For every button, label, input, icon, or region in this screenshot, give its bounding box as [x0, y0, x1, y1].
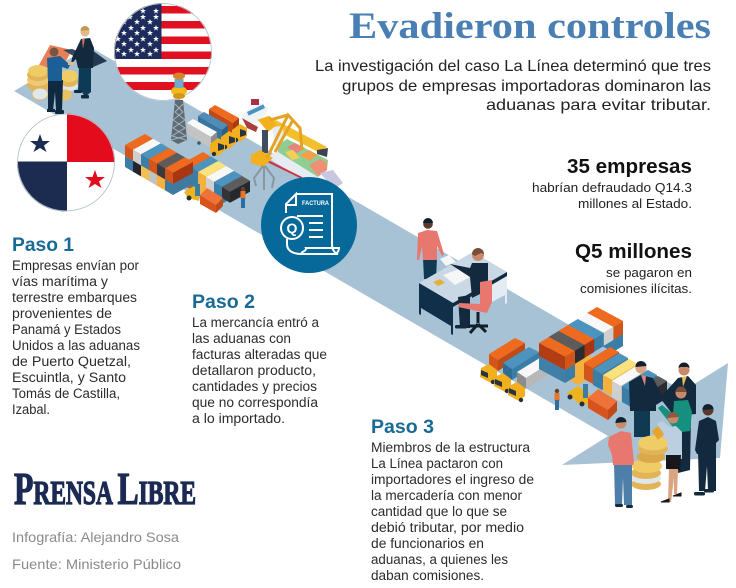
step 2: las aduanas con: [192, 331, 291, 346]
step 2: que no correspondía: [192, 395, 319, 410]
step 1: vías marítima y: [12, 274, 108, 289]
invoice badge: [261, 177, 357, 273]
step 2: La mercancía entró a: [192, 315, 320, 330]
step 3: daban comisiones.: [371, 568, 484, 583]
step 1: Unidos a las aduanas: [12, 338, 140, 353]
step 1: Izabal.: [12, 402, 50, 417]
flag: Panama: [17, 113, 116, 212]
step 1: Paso 1: [12, 235, 74, 256]
intro text: [315, 58, 711, 114]
step 2: a lo importado.: [192, 411, 285, 426]
intro text: grupos de empresas importadoras dominaron las: [342, 78, 711, 95]
step 1: Tomás de Castilla,: [12, 386, 120, 401]
step 3: [371, 417, 534, 583]
stat: Q5 millones: Q5 millones: [575, 241, 692, 263]
step 3: La Línea pactaron con: [371, 456, 503, 471]
illustration: container stacks left: [125, 134, 193, 195]
illustration: forklift and small container: [184, 184, 223, 213]
step 3: aduanas, a quienes les: [371, 552, 508, 567]
step 1: [12, 235, 140, 417]
intro text: aduanas para evitar tributar.: [486, 97, 711, 114]
illustration: business handshake with coins: [27, 26, 107, 114]
invoice badge: Q: [287, 220, 298, 236]
step 2: cantidades y precios: [192, 379, 317, 394]
stat: Q5 millones: se pagaron en: [606, 265, 692, 280]
step 1: provenientes de: [12, 306, 112, 321]
illustration: trucks lower group: [480, 338, 553, 402]
stat: 35 empresas: millones al Estado.: [578, 196, 692, 211]
step 3: de funcionarios en: [371, 536, 484, 551]
step 3: debió tributar, por medio: [371, 520, 524, 535]
step 3: la mercadería con menor: [371, 488, 523, 503]
step 1: Panamá y Estados: [12, 322, 121, 337]
credits: [12, 530, 181, 572]
stat: Q5 millones: comisiones ilícitas.: [580, 281, 692, 296]
invoice badge: FACTURA: [302, 200, 329, 207]
illustration: port worker: [240, 187, 246, 208]
logo: Prensa Libre: PRENSA LIBRE: [14, 463, 196, 514]
step 1: terrestre embarques: [12, 290, 137, 305]
step 3: Paso 3: [371, 417, 434, 438]
credits: Infografía: Alejandro Sosa: [12, 530, 179, 545]
stat: Q5 millones: [575, 241, 692, 296]
illustration: container stacks lower: [539, 307, 667, 413]
stat: 35 empresas: habrían defraudado Q14.3: [532, 180, 692, 195]
stat: 35 empresas: 35 empresas: [567, 156, 692, 178]
step 2: facturas alteradas que: [192, 347, 327, 362]
illustration: ships and crane: [242, 99, 343, 190]
step 2: detallaron producto,: [192, 363, 316, 378]
illustration: container stacks right: [183, 152, 250, 204]
intro text: La investigación del caso La Línea determinó que tres: [315, 58, 711, 75]
arrow band: [14, 47, 728, 465]
step 1: Empresas envían por: [12, 258, 140, 273]
illustration: group of people with coins: [608, 361, 719, 508]
step 2: [192, 292, 327, 426]
illustration: port tower: [171, 72, 187, 144]
flag: United States: [114, 3, 212, 101]
step 2: Paso 2: [192, 292, 255, 313]
step 1: de Puerto Quetzal,: [12, 354, 131, 369]
step 3: cantidad que lo que se: [371, 504, 507, 519]
illustration: customs desk scene: [417, 218, 507, 335]
title: Evadieron controles: [349, 6, 711, 47]
stat: 35 empresas: [532, 156, 692, 211]
illustration: trucks upper group: [187, 105, 247, 156]
step 1: Escuintla, y Santo: [12, 370, 126, 385]
step 3: importadores el ingreso de: [371, 472, 534, 487]
illustration: lower forklift, worker and container: [554, 384, 617, 420]
credits: Fuente: Ministerio Público: [12, 557, 181, 572]
step 3: Miembros de la estructura: [371, 440, 531, 455]
